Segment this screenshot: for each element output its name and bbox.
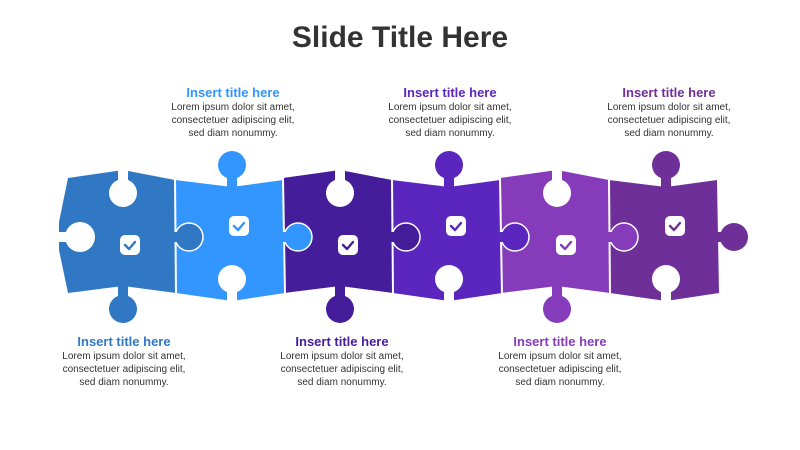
text top 1: Lorem ipsum dolor sit amet, [171, 102, 295, 113]
piece 3 [283, 170, 393, 293]
piece 1 [59, 170, 176, 293]
text bottom 3: Lorem ipsum dolor sit amet, [498, 351, 622, 362]
text top 2: sed diam nonummy. [405, 128, 495, 139]
text bottom 2: Insert title here [295, 334, 389, 349]
text top 3: Lorem ipsum dolor sit amet, [607, 102, 731, 113]
text top 3 [607, 85, 731, 139]
text top 3: consectetuer adipiscing elit, [608, 115, 730, 126]
text top 1: Insert title here [186, 85, 280, 100]
text top 2: Lorem ipsum dolor sit amet, [388, 102, 512, 113]
text bottom 1: Lorem ipsum dolor sit amet, [62, 351, 186, 362]
text bottom 2 [280, 334, 404, 388]
text bottom 1: consectetuer adipiscing elit, [63, 364, 185, 375]
text bottom 2: consectetuer adipiscing elit, [281, 364, 403, 375]
text bottom 1: sed diam nonummy. [79, 377, 169, 388]
text top 3: Insert title here [622, 85, 716, 100]
text bottom 1 [62, 334, 186, 388]
text top 2: consectetuer adipiscing elit, [389, 115, 511, 126]
text top 1: sed diam nonummy. [188, 128, 278, 139]
piece 5 [500, 170, 610, 293]
text top 2: Insert title here [403, 85, 497, 100]
text bottom 2: sed diam nonummy. [297, 377, 387, 388]
check icons [120, 216, 685, 255]
piece 6 [609, 180, 719, 301]
text top 1: consectetuer adipiscing elit, [172, 115, 294, 126]
text bottom 3: consectetuer adipiscing elit, [499, 364, 621, 375]
text bottom 3: sed diam nonummy. [515, 377, 605, 388]
tabs [109, 151, 748, 323]
text top 1 [171, 85, 295, 139]
title: Slide Title Here [292, 21, 508, 54]
text top 3: sed diam nonummy. [624, 128, 714, 139]
text bottom 3: Insert title here [513, 334, 607, 349]
text bottom 2: Lorem ipsum dolor sit amet, [280, 351, 404, 362]
piece 4 [392, 180, 502, 301]
text bottom 3 [498, 334, 622, 388]
piece 2 [175, 180, 285, 301]
text bottom 1: Insert title here [77, 334, 171, 349]
text top 2 [388, 85, 512, 139]
